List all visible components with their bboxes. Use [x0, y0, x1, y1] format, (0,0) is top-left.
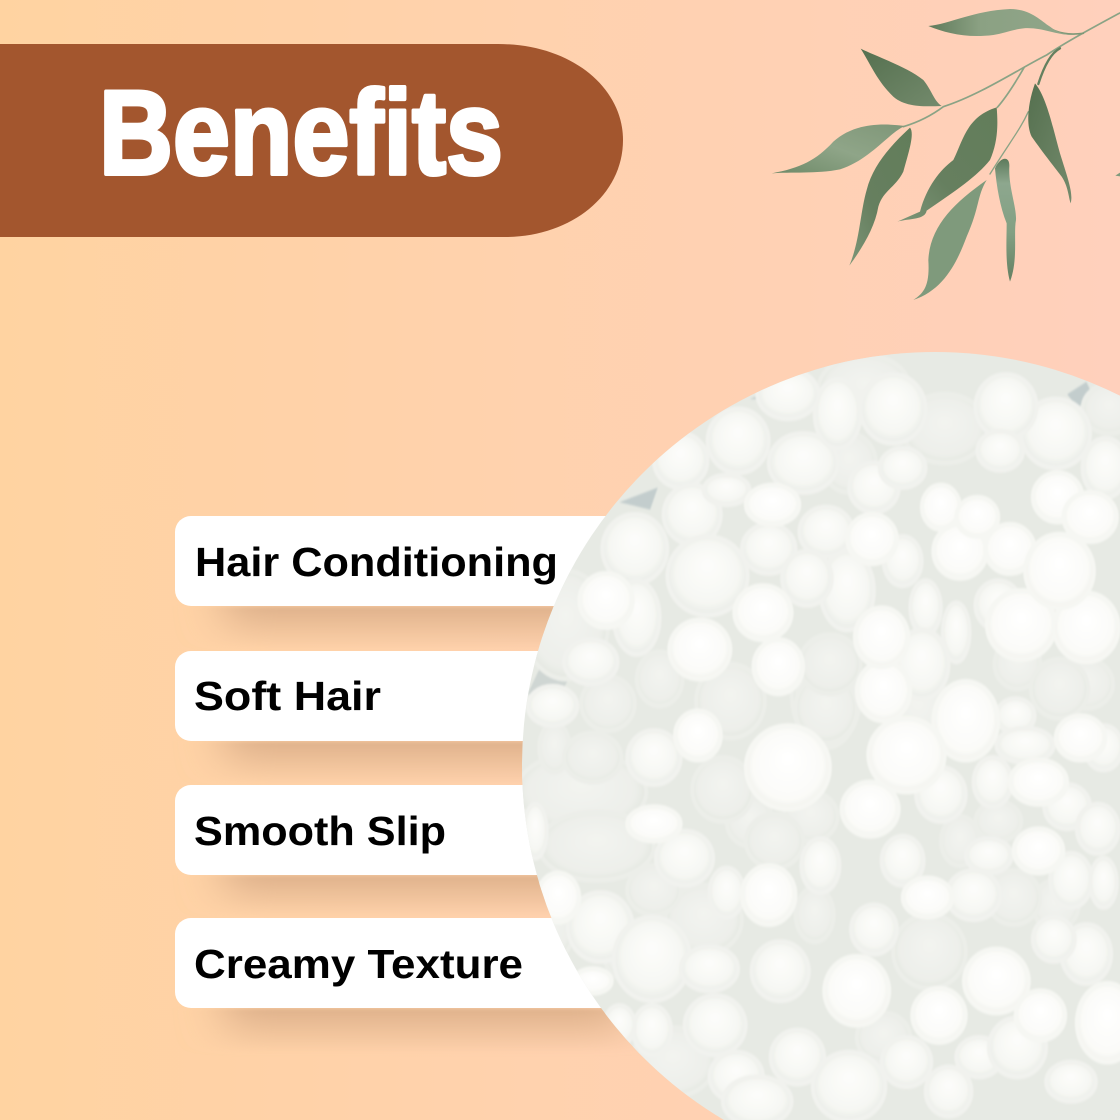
card: Soft Hair: Soft Hair [194, 673, 381, 719]
card: Soft Hair [175, 651, 655, 741]
card: Hair Conditioning [175, 516, 655, 606]
card: Smooth Slip [175, 785, 655, 875]
card: Smooth Slip: Smooth Slip [194, 808, 446, 854]
icon: eucalyptus branch [772, 9, 1120, 300]
benefit shadows [225, 606, 625, 1054]
card: Creamy Texture: Creamy Texture [194, 941, 523, 987]
card: Hair Conditioning: Hair Conditioning [195, 539, 558, 585]
heading: Benefits: Benefits [99, 66, 503, 200]
card: Creamy Texture [175, 918, 655, 1008]
title banner [0, 44, 623, 237]
photo: white wax pellets in circle [512, 350, 1120, 1120]
